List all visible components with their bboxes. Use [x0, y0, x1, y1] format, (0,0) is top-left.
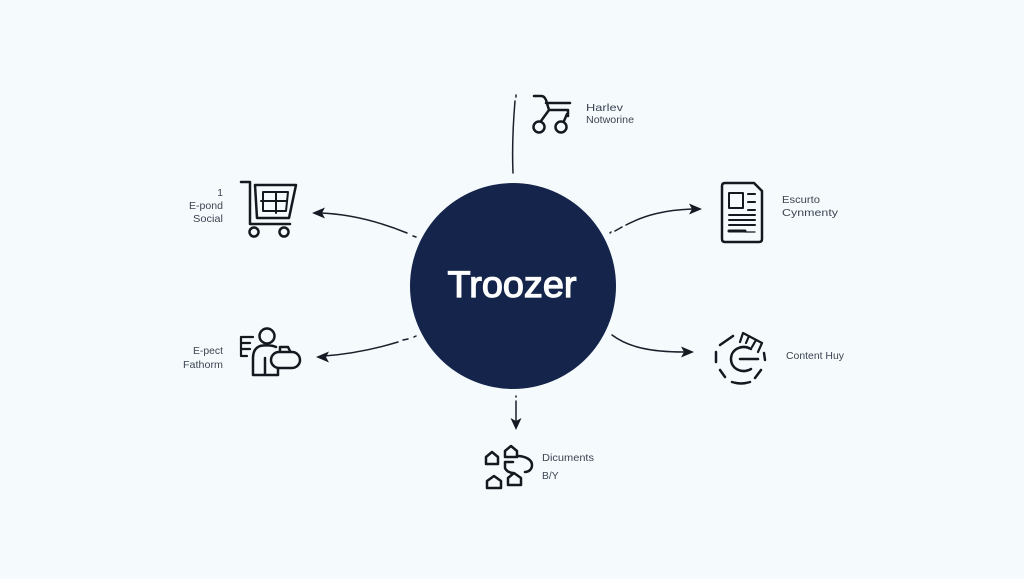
- label: lower right: Content Huy: [786, 351, 845, 362]
- label: upper left: [189, 188, 223, 225]
- central hub circle: [410, 183, 616, 389]
- icon: target gauge: [716, 333, 765, 384]
- label: lower left: E-pect: [193, 346, 223, 357]
- label: upper left: 1: [217, 188, 223, 199]
- icon: stroller cart: [534, 96, 570, 132]
- arrow: bottom: [510, 396, 522, 430]
- icon: person with bag: [241, 328, 300, 375]
- label: upper left: Social: [193, 214, 223, 225]
- label: upper left: E-pond: [189, 201, 223, 212]
- arrow: upper right: [610, 204, 702, 233]
- arrow: top connector: [513, 95, 516, 173]
- hub title: Troozer: [448, 264, 576, 305]
- label: upper right: Escurto: [782, 195, 820, 206]
- icon: document: [722, 183, 762, 242]
- label: lower left: [183, 346, 223, 371]
- arrow: upper left: [312, 208, 416, 237]
- label: upper right: Cynmenty: [782, 208, 839, 219]
- icon: shopping cart: [241, 182, 296, 236]
- label: bottom: [542, 453, 594, 482]
- arrow: lower left: [316, 336, 416, 362]
- label: bottom: B/Y: [542, 471, 559, 482]
- icon: connected houses: [486, 446, 532, 488]
- label: bottom: Dicuments: [542, 453, 594, 464]
- label: top: Harlev: [586, 103, 624, 114]
- label: upper right: [782, 195, 839, 219]
- label: lower left: Fathorm: [183, 360, 223, 371]
- arrow: lower right: [612, 335, 694, 358]
- label: top: [586, 103, 634, 126]
- label: top: Notworine: [586, 115, 634, 126]
